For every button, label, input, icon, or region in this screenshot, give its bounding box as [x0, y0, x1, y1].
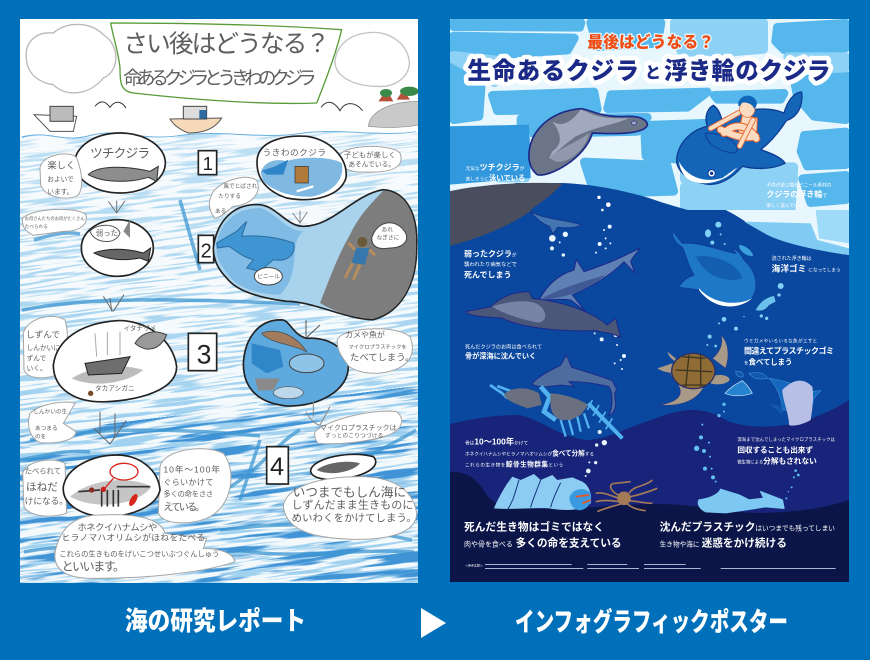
caption: sinking bones: 死んだクジラのお肉は食べられて: [465, 342, 542, 350]
cloud: left: [26, 24, 116, 93]
title: subtitle: 最後はどうなる？: [587, 32, 714, 51]
bubbles: [597, 196, 611, 212]
caption: ocean waste: 流された浮き輪は: [772, 255, 812, 262]
blob: float whale dumped and boy stranded: [213, 190, 417, 320]
caption: turtles mistake plastic: 間違えてプラスチックゴミ: [744, 346, 834, 356]
speech: supporting life: えている。: [163, 502, 205, 514]
caption: vinyl: [254, 268, 282, 285]
number box 4: [267, 447, 288, 484]
birds: [95, 102, 363, 111]
speech: turtle and fish: カメや魚が: [345, 329, 385, 339]
speech: deep-sea life: のを: [35, 433, 46, 440]
wave layer: darkest: [449, 472, 849, 600]
swimming small whale: [531, 212, 582, 234]
crayon sea: [20, 131, 418, 583]
conclusion: dead creatures: 死んだ生き物はゴミではなく: [464, 521, 604, 534]
large grey whale silhouette: [449, 183, 562, 218]
sea turtle: [657, 335, 730, 405]
caption: healthy whale: 楽しそうに泳いでいる: [466, 174, 525, 183]
speech: nuisance: いつまでもしん海に: [293, 486, 406, 500]
arrow: report to poster: [421, 608, 446, 638]
footer label: research report: 海の研究レポート: [125, 606, 306, 636]
speech: deep-sea life: しんかいの生: [33, 407, 68, 415]
speech: nuisance: [283, 477, 417, 539]
speech: meat eaten: たべられる: [25, 224, 48, 230]
speech: bone-worm explanation: ヒラノマハオリムシがほねをたべる: [62, 532, 205, 543]
speech: children playing: 子どもが楽しく: [344, 150, 396, 159]
speech: bone-worm explanation: これらの生きものをげいこつせいぶつぐんしゅう: [59, 550, 219, 559]
caption: sinking bones: [465, 342, 542, 360]
fish eating plastic: [769, 378, 821, 410]
title: main: 生命あるクジラ: [467, 58, 639, 85]
caption: deep-sea microplastic: [737, 436, 836, 465]
caption: float whale: 楽しく遊んでいる: [766, 202, 803, 209]
speech: microplastic: ずっとのこりつづける: [325, 431, 383, 439]
caption: vinyl: ビニール: [257, 273, 280, 281]
bubble: tsuchi whale: ツチクジラ: [90, 146, 150, 160]
bubble: carcass on sea floor: イタチザメ: [123, 324, 156, 333]
conclusion: dead creatures: 肉や骨を食べる多くの命を支えている: [464, 536, 622, 549]
caption: weakened whale: [464, 248, 517, 279]
speech: beached: [372, 223, 407, 249]
speech: sinking: ずんで: [27, 354, 47, 363]
speech: sinking: しんかいに: [27, 344, 60, 352]
speech: meat eaten: お母さんたちのお肉がたくさん: [25, 215, 85, 222]
caption: deep-sea microplastic: 回収することも出来ず: [737, 445, 813, 455]
fish with plastic: [769, 381, 813, 426]
caption: healthy whale: 元気なツチクジラが: [466, 162, 525, 172]
tsuchi whale: [529, 109, 647, 175]
speech: blown away: 風でとばされ: [223, 182, 258, 190]
speech: bone-worm explanation: ホネクイハナムシや: [77, 523, 157, 533]
sunken plastic: [698, 489, 784, 513]
caption: weakened whale: 弱ったクジラが: [464, 248, 517, 258]
caption: deep-sea microplastic: 微生物による分解もされない: [737, 455, 817, 465]
speech: supporting life: [158, 449, 231, 523]
title: main: 浮き輪のクジラ: [664, 58, 831, 85]
giant spider crab: [596, 480, 657, 512]
caption: ocean waste: 海洋ゴミになってしまう: [772, 263, 841, 274]
caption: float whale: クジラの浮き輪で: [766, 189, 827, 199]
speech: meat eaten: [22, 209, 86, 235]
bubble: float whale: [257, 136, 346, 200]
title: main: と: [645, 64, 661, 82]
sinking float whale: [672, 231, 756, 306]
bubbles: left: [549, 209, 626, 370]
speech: sinking: しずんで: [26, 329, 60, 339]
number box 3: [188, 333, 217, 371]
speech: swimming: います。: [47, 188, 73, 196]
panel: hand-drawn research report: [20, 19, 418, 583]
whale-fall carcass: [494, 474, 591, 510]
number box 4: 4: [270, 453, 284, 481]
speech: children playing: [339, 146, 401, 172]
number box 2: 2: [201, 240, 212, 262]
conclusion: sunk plastic: [660, 521, 835, 549]
speech: deep-sea life: あつまる: [35, 425, 58, 432]
speech: leaving bones: けになる。: [25, 496, 68, 506]
caption: ocean waste: [772, 255, 841, 274]
bubble: float whale: うきわのクジラ: [263, 147, 326, 157]
speech: leaving bones: たべられて: [25, 466, 61, 475]
title box: [111, 23, 342, 103]
conclusion: dead creatures: [464, 521, 622, 549]
number box 1: 1: [203, 153, 213, 174]
deep ocean: [449, 183, 739, 218]
speech: blown away: たりする: [218, 193, 241, 200]
speech: beached: あれ: [382, 226, 393, 233]
arrow to microplastic: [306, 402, 330, 425]
blue float whale: [217, 221, 294, 271]
plastic pieces near fish: [725, 371, 767, 396]
arrow: [108, 201, 125, 213]
arrow to deep sea: [103, 295, 124, 311]
caption: deep-sea microplastic: 深海まで沈んでしまったマイクロプラスチックは: [737, 436, 836, 443]
speech: bone-worm explanation: といいます。: [62, 560, 125, 574]
speech: turtle and fish: [337, 329, 414, 373]
footer label: infographic poster: インフォグラフィックポスター: [515, 607, 788, 637]
speech: supporting life: ぐらいかけて: [163, 478, 213, 487]
caption: whale-fall community: [465, 437, 594, 468]
grey whale silhouette continued: [449, 210, 532, 246]
bubble: carcass on sea floor: タカアシガニ: [95, 384, 135, 393]
speech: leaving bones: [23, 460, 68, 516]
inflatable whale float: [677, 92, 802, 184]
speech: supporting life: 多くの命をささ: [163, 490, 213, 499]
speech: children playing: あそんでいる。: [348, 161, 395, 169]
boat: left: [34, 106, 77, 131]
bubble: whale fall bones: [63, 455, 160, 517]
speech: swimming: 楽しく: [47, 160, 75, 171]
deep ocean continued: [449, 210, 849, 450]
speech: leaving bones: ほねだ: [26, 482, 58, 494]
speech: turtle and fish: たべてしまう。: [350, 353, 414, 363]
caption: turtles mistake plastic: [744, 337, 834, 366]
number box 2: [198, 235, 214, 263]
boy on float: [711, 96, 757, 146]
speech: microplastic: [315, 411, 402, 444]
speech: sinking: [23, 316, 67, 378]
bubble: turtle and fish eating plastic: [243, 320, 348, 406]
caption: weakened whale: 襲われたり病気などで: [464, 260, 517, 268]
arrow: [94, 412, 126, 444]
arrow to blob: [293, 211, 307, 223]
caption: float whale: 子供が遊ぶ塩化ビニール素材の: [766, 181, 832, 188]
caption: turtles mistake plastic: を食べてしまう: [744, 357, 792, 366]
bubble: tsuchi whale: [75, 133, 165, 193]
caption: whale-fall community: 骨は10〜100年かけて: [465, 437, 528, 447]
bubble: carcass on sea floor: [53, 321, 177, 402]
speech: swimming: およいで: [47, 175, 74, 183]
speech: nuisance: めいわくをかけてしまう。: [292, 513, 417, 525]
caption: turtles mistake plastic: ウミガメやいろいろな魚がエサと: [744, 337, 817, 344]
conclusion: sunk plastic: 生き物や海に迷惑をかけ続ける: [660, 536, 787, 549]
caption: healthy whale: [466, 162, 525, 183]
wave layer: middle: [449, 400, 849, 600]
speech: bone-worm explanation: [55, 515, 235, 578]
caption: whale-fall community: ホネクイハナムシやヒラノマハオリムシが食べて分解する: [465, 448, 594, 457]
bubble: weakened whale: 弱った: [96, 228, 118, 237]
sinking dolphin: [532, 355, 617, 415]
pool water tiles: [454, 23, 846, 203]
panel: infographic poster: [449, 19, 849, 600]
boat: centre: [170, 106, 222, 133]
bubble: sunk plastic: [311, 454, 376, 480]
references: ＜参考文献＞: [465, 563, 483, 568]
title line 2: 命あるクジラとうきわのクジラ: [123, 68, 317, 89]
arrow: [306, 320, 320, 337]
number box 3: 3: [197, 339, 211, 369]
speech: swimming: [40, 154, 82, 198]
speech: blown away: ある: [215, 208, 226, 215]
speech: deep-sea life: [28, 402, 76, 443]
title line 1: さい後はどうなる？: [123, 30, 330, 58]
speech: supporting life: 10年〜100年: [163, 464, 220, 475]
cloud: right: [335, 32, 409, 87]
speech: sinking: いく。: [27, 365, 47, 373]
caption: weakened whale: 死んでしまう: [464, 270, 512, 279]
speech: blown away: [209, 177, 258, 218]
lower-right pool: [726, 210, 849, 255]
bubbles: lower left: [585, 430, 607, 477]
speech: turtle and fish: マイクロプラスチックを: [348, 343, 407, 350]
bubble: weakened whale: [81, 220, 153, 276]
speech: nuisance: しずんだまま生きものに: [292, 497, 413, 511]
island: [368, 87, 420, 127]
number box 1: [198, 151, 217, 175]
bubbles: lower right: [694, 403, 800, 499]
caption: float whale: [766, 181, 832, 209]
speech: microplastic: マイクロプラスチックは: [320, 424, 397, 432]
conclusion: sunk plastic: 沈んだプラスチックはいつまでも残ってしまい: [660, 521, 835, 534]
stranded boy: [345, 237, 375, 280]
speech: beached: なぎさに: [377, 233, 400, 241]
caption: sinking bones: 骨が深海に沈んでいく: [465, 351, 536, 360]
bubbles: light blue: [705, 222, 784, 347]
weakened dolphin upper: [539, 248, 640, 312]
darker water in lower-left: [449, 125, 531, 185]
plastic fragment: [756, 296, 776, 311]
caption: whale-fall community: これらの生き物を鯨骨生物群集という: [465, 459, 563, 468]
whale carcass and skeleton: [490, 385, 622, 438]
title: main: [467, 58, 831, 85]
dead dolphin lower: [466, 292, 621, 337]
